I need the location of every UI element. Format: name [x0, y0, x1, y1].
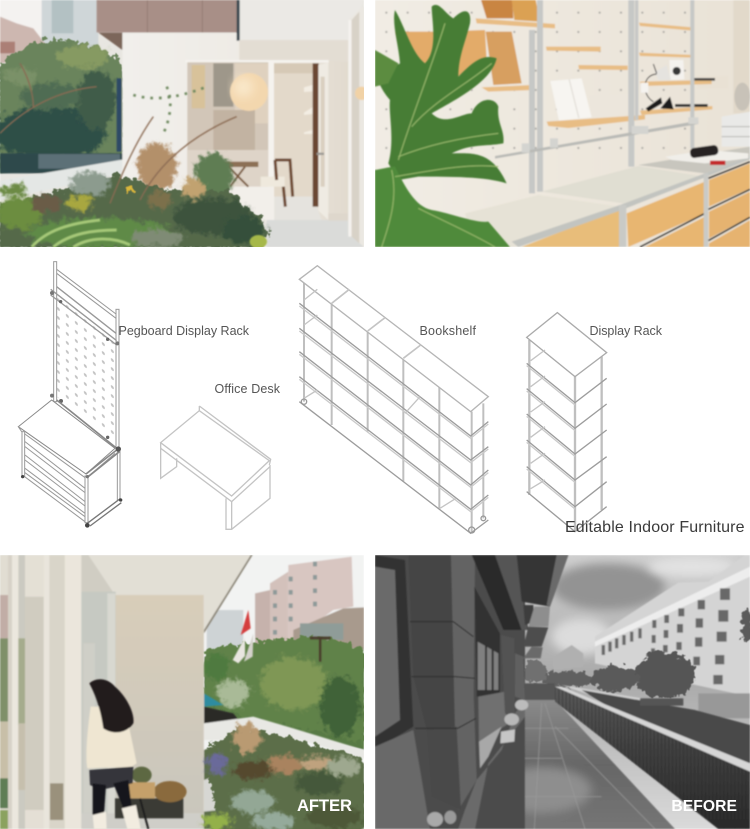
photo: after, woman on renovated terrace: [0, 555, 364, 829]
photo: pegboard display shelves with plant leaf in foreground: [375, 0, 750, 247]
plywood sample boards: [396, 0, 540, 85]
aluminium frame posts: [495, 0, 698, 193]
label: AFTER: AFTER: [297, 796, 352, 815]
label: BEFORE: BEFORE: [671, 798, 737, 815]
drawing: display rack: [527, 313, 607, 532]
photo: terrace garden after renovation with lantern window: [0, 0, 368, 248]
drawing: pegboard display rack: [18, 262, 122, 528]
label: Office Desk: Office Desk: [214, 382, 281, 396]
drawing: office desk: [161, 406, 271, 529]
background tree: [0, 39, 123, 167]
foreground plant leaf: [375, 5, 510, 247]
furniture line drawings section: [18, 262, 745, 536]
label: Display Rack: Display Rack: [590, 324, 663, 338]
woman seen from behind: [86, 679, 187, 829]
drawing: bookshelf: [299, 266, 488, 533]
street trees: [523, 608, 750, 698]
label: Bookshelf: Bookshelf: [420, 324, 477, 338]
wooden shelves: [476, 18, 712, 128]
label: Pegboard Display Rack: Pegboard Display Rack: [118, 324, 250, 338]
grass leaves and bare branches: [0, 63, 267, 248]
garden planting: [0, 143, 268, 248]
foreground planting: [202, 723, 364, 829]
background trees: [203, 637, 364, 743]
caption: Editable Indoor Furniture: Editable Indoor Furniture: [565, 519, 745, 536]
glass cabinets and drawers: [465, 112, 750, 247]
photo: before, grayscale empty terrace: [375, 555, 750, 829]
